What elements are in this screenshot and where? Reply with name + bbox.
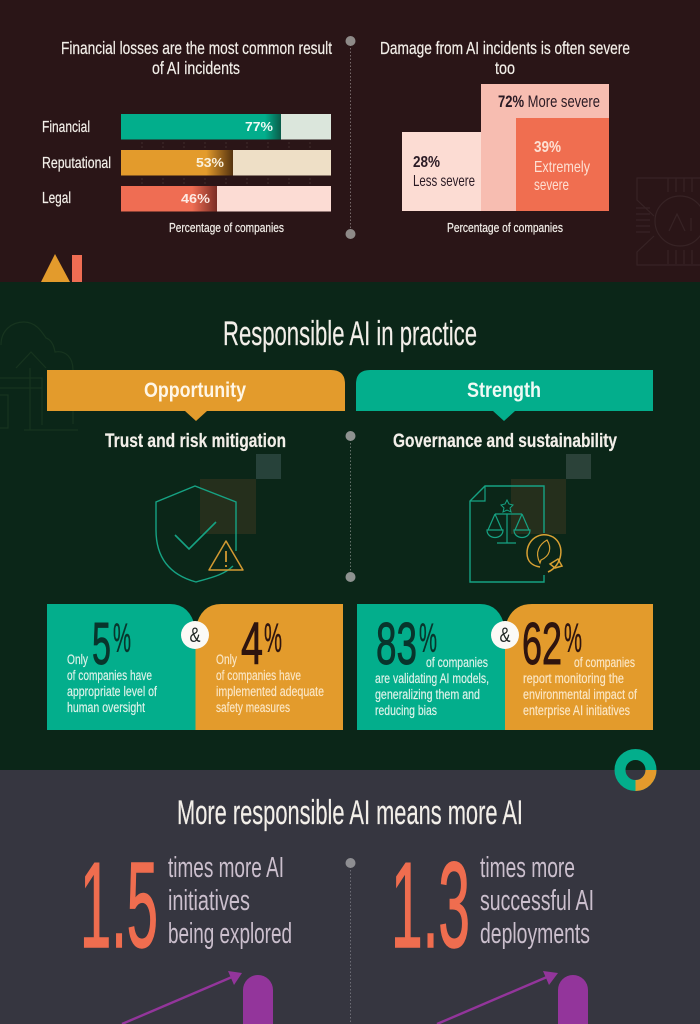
ampersand badge: & (190, 624, 200, 647)
panel: responsible AI in practice (0, 282, 700, 770)
stat card: 5% human oversight: of companies have (67, 668, 152, 683)
subheading: trust and risk mitigation: Trust and risk mitigation (105, 431, 286, 452)
stat card: 62% environmental impact: environmental impact of (523, 687, 637, 702)
stat card: 83% validating models: reducing bias (375, 703, 437, 718)
chart: severity blocks (402, 84, 609, 235)
stat card: 5% human oversight: appropriate level of (67, 684, 157, 699)
banner: strength (356, 370, 653, 421)
axis label: Percentage of companies (169, 220, 284, 235)
stat card: 62% environmental impact: of companies (574, 655, 635, 670)
stat card: 4% safety measures: safety measures (216, 700, 290, 715)
banner: opportunity (47, 370, 345, 421)
bar: financial 77%: Financial (42, 119, 90, 136)
heading: damage severity: Damage from AI incidents is often severe (380, 38, 630, 58)
stat: 1.3 times: 1.3 (391, 837, 470, 973)
icon: ghost AI chip (636, 178, 700, 265)
bar: financial 77%: 77% (245, 119, 273, 134)
axis label: Percentage of companies (447, 220, 563, 235)
bar: financial 77% (42, 114, 331, 140)
ampersand badge: & (500, 624, 510, 647)
icon: donut (620, 754, 651, 786)
stat card: 62% environmental impact: report monitoring the (523, 671, 624, 686)
panel: more responsible AI (0, 770, 700, 1024)
stat card: 4% safety measures: Only (216, 652, 237, 667)
heading: financial losses (61, 38, 332, 78)
label: less severe (413, 154, 475, 190)
stat card: 83% validating models: of companies (426, 655, 488, 670)
banner: opportunity: Opportunity (144, 379, 246, 402)
stat: 1.5 times: 1.5 (80, 837, 158, 973)
heading: more responsible AI: More responsible AI means more AI (177, 794, 523, 832)
stat card: 5% human oversight: Only (67, 652, 88, 667)
panel: AI incidents (0, 0, 700, 282)
label: extremely severe: Extremely (534, 159, 590, 176)
bar: reputational 53% (42, 150, 331, 176)
stat card: 83% validating models: % (419, 615, 437, 661)
stat: 1.3 times: deployments (480, 918, 590, 950)
stat card: 83% validating models: 83 (376, 611, 417, 677)
divider (346, 858, 356, 1024)
ampersand badge (491, 621, 519, 649)
bar: legal 46%: Legal (42, 190, 71, 207)
decorative squares left (200, 454, 281, 534)
heading: financial losses: Financial losses are the most common result (61, 38, 332, 58)
banner: strength: Strength (467, 379, 541, 402)
stat card: 4% safety measures (196, 604, 343, 730)
heading: damage severity (380, 38, 630, 78)
stat card: 4% safety measures: of companies have (216, 668, 301, 683)
stat card: 83% validating models: generalizing them and (375, 687, 480, 702)
stat card: 83% validating models (357, 604, 505, 730)
icon: document with scales and plug (470, 486, 562, 582)
bar: legal 46% (42, 186, 331, 212)
label: less severe: 28% (413, 154, 440, 171)
stat card: 4% safety measures: % (264, 615, 282, 661)
icon: shield with warning (156, 486, 243, 582)
stat card: 4% safety measures: 4 (241, 611, 263, 677)
chart: rising arrow and bar left (122, 971, 273, 1024)
stat card: 62% environmental impact: % (564, 615, 582, 661)
stat: 1.3 times: times more (480, 852, 575, 884)
stat card: 62% environmental impact: enterprise AI initiatives (523, 703, 630, 718)
heading: responsible AI in practice: Responsible AI in practice (223, 315, 477, 353)
label: less severe: Less severe (413, 173, 475, 190)
stat: 1.5 times: being explored (168, 918, 292, 950)
icon: AI logo (41, 254, 82, 282)
stat card: 83% validating models: are validating AI models, (375, 671, 489, 686)
bar chart: incident results (42, 114, 331, 235)
stat: 1.3 times: successful AI (480, 885, 594, 917)
bar: reputational 53%: Reputational (42, 155, 111, 172)
stat card: 5% human oversight: % (113, 615, 131, 661)
heading: financial losses: of AI incidents (152, 58, 240, 78)
divider (346, 431, 356, 582)
divider (346, 36, 356, 239)
label: extremely severe: 39% (534, 139, 561, 156)
icon: ghost cloud (0, 322, 78, 430)
label: extremely severe (534, 139, 590, 194)
subheading: governance and sustainability: Governance and sustainability (393, 431, 617, 452)
stat: 1.5 times: initiatives (168, 885, 250, 917)
bar: reputational 53%: 53% (196, 155, 224, 170)
chart: rising arrow and bar right (437, 971, 588, 1024)
stat card: 4% safety measures: implemented adequate (216, 684, 324, 699)
stat card: 5% human oversight: human oversight (67, 700, 145, 715)
label: extremely severe: severe (534, 177, 569, 194)
stat card: 62% environmental impact: 62 (522, 611, 562, 677)
decorative squares right (511, 454, 591, 534)
stat: 1.5 times: times more AI (168, 852, 284, 884)
label: more severe: 72% More severe (498, 92, 600, 111)
stat card: 62% environmental impact (505, 604, 653, 730)
stat card: 5% human oversight: 5 (92, 611, 111, 677)
bar: legal 46%: 46% (181, 191, 210, 206)
ampersand badge (181, 621, 209, 649)
heading: damage severity: too (495, 58, 515, 78)
stat card: 5% human oversight (47, 604, 196, 730)
